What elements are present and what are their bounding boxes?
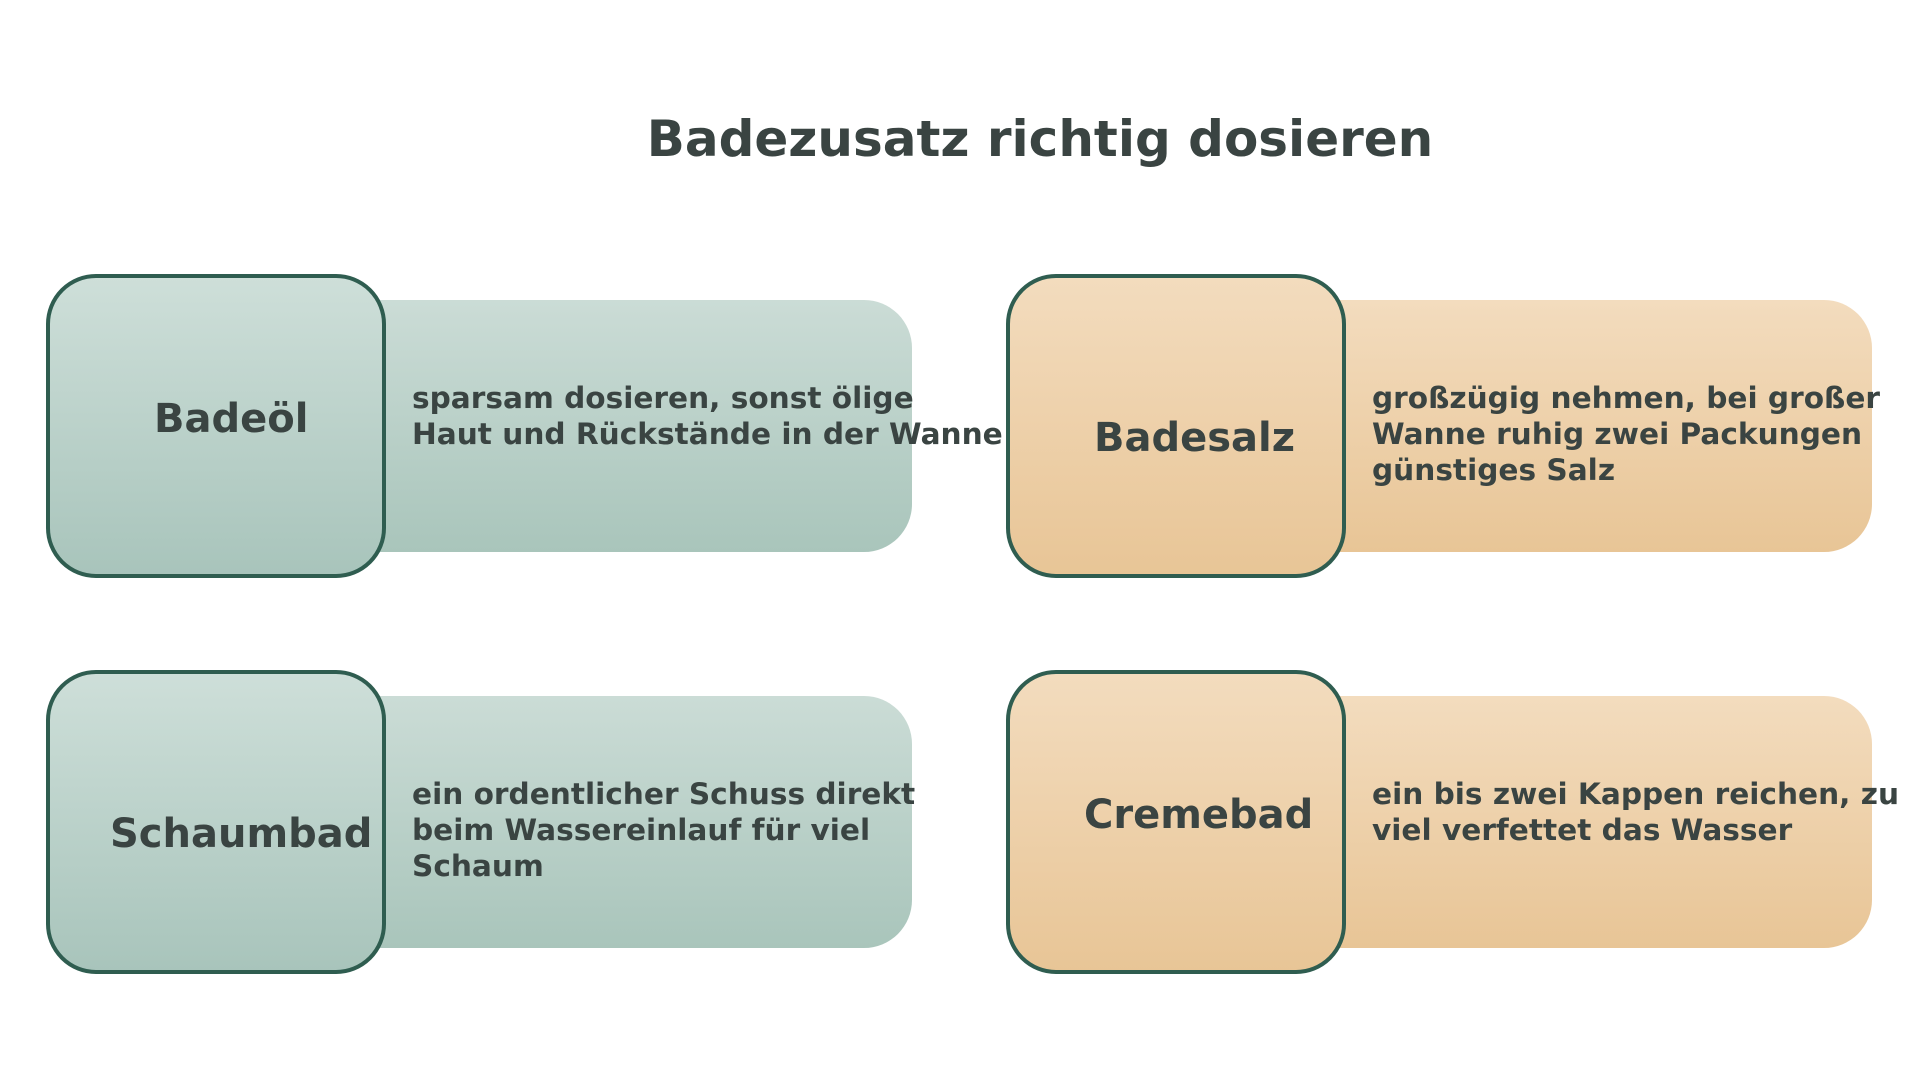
badge: Badesalz xyxy=(1008,276,1344,576)
badge: Schaumbad xyxy=(48,672,384,972)
description panel: Badesalz xyxy=(1260,300,1872,552)
description panel: Badeöl xyxy=(300,300,912,552)
label: Schaumbad: Schaumbad xyxy=(110,811,372,857)
badge: Badeöl xyxy=(48,276,384,576)
badge: Cremebad xyxy=(1008,672,1344,972)
label: Cremebad: Cremebad xyxy=(1084,792,1313,838)
description: Schaumbad: ein ordentlicher Schuss direkt xyxy=(412,777,915,811)
description panel: Schaumbad xyxy=(300,696,912,948)
panel: Cremebad xyxy=(1008,672,1899,972)
description: Badesalz: Wanne ruhig zwei Packungen xyxy=(1372,417,1862,451)
description: Badesalz: günstiges Salz xyxy=(1372,453,1615,487)
description: Badeöl: sparsam dosieren, sonst ölige xyxy=(412,381,914,415)
description: Badesalz: großzügig nehmen, bei großer xyxy=(1372,381,1880,415)
description: Cremebad: viel verfettet das Wasser xyxy=(1372,813,1793,847)
panel: Badesalz xyxy=(1008,276,1880,576)
description: Schaumbad: Schaum xyxy=(412,849,544,883)
label: Badeöl: Badeöl xyxy=(154,396,308,442)
description: Cremebad: ein bis zwei Kappen reichen, zu xyxy=(1372,777,1899,811)
label: Badesalz: Badesalz xyxy=(1094,415,1295,461)
panel: Schaumbad xyxy=(48,672,915,972)
panel: Badeöl xyxy=(48,276,1003,576)
description: Badeöl: Haut und Rückstände in der Wanne xyxy=(412,417,1003,451)
title: Badezusatz richtig dosieren xyxy=(647,110,1433,168)
description panel: Cremebad xyxy=(1260,696,1872,948)
description: Schaumbad: beim Wassereinlauf für viel xyxy=(412,813,870,847)
